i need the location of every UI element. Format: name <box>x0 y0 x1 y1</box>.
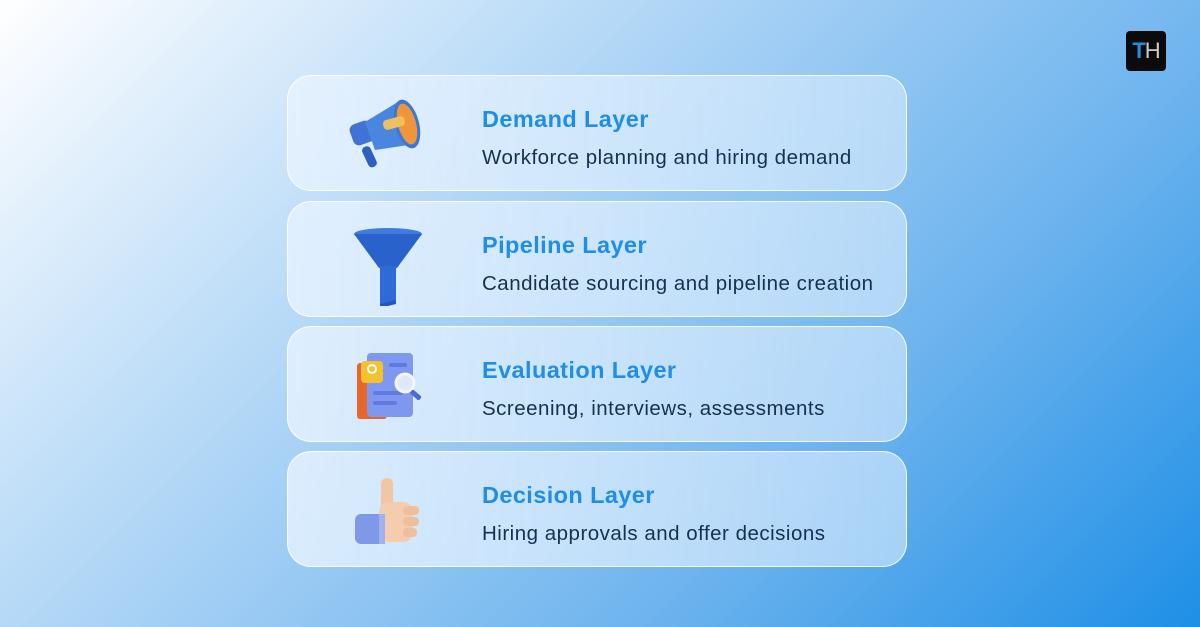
icon: funnel <box>354 228 422 306</box>
panel: evaluation <box>287 326 907 442</box>
text: Screening, interviews, assessments <box>482 397 825 420</box>
panel: demand <box>287 75 907 191</box>
logo <box>1126 31 1166 71</box>
title: Demand Layer <box>482 106 649 132</box>
title: Pipeline Layer <box>482 232 647 258</box>
title: Evaluation Layer <box>482 357 676 383</box>
text: Workforce planning and hiring demand <box>482 146 852 169</box>
text: Hiring approvals and offer decisions <box>482 522 826 545</box>
icon: document search <box>357 353 422 419</box>
icon: thumbs up <box>355 478 419 544</box>
icon: megaphone <box>350 100 420 168</box>
title: Decision Layer <box>482 482 655 508</box>
logo: TH <box>1132 38 1160 63</box>
panel: decision <box>287 451 907 567</box>
text: Candidate sourcing and pipeline creation <box>482 272 874 295</box>
panel: pipeline <box>287 201 907 317</box>
